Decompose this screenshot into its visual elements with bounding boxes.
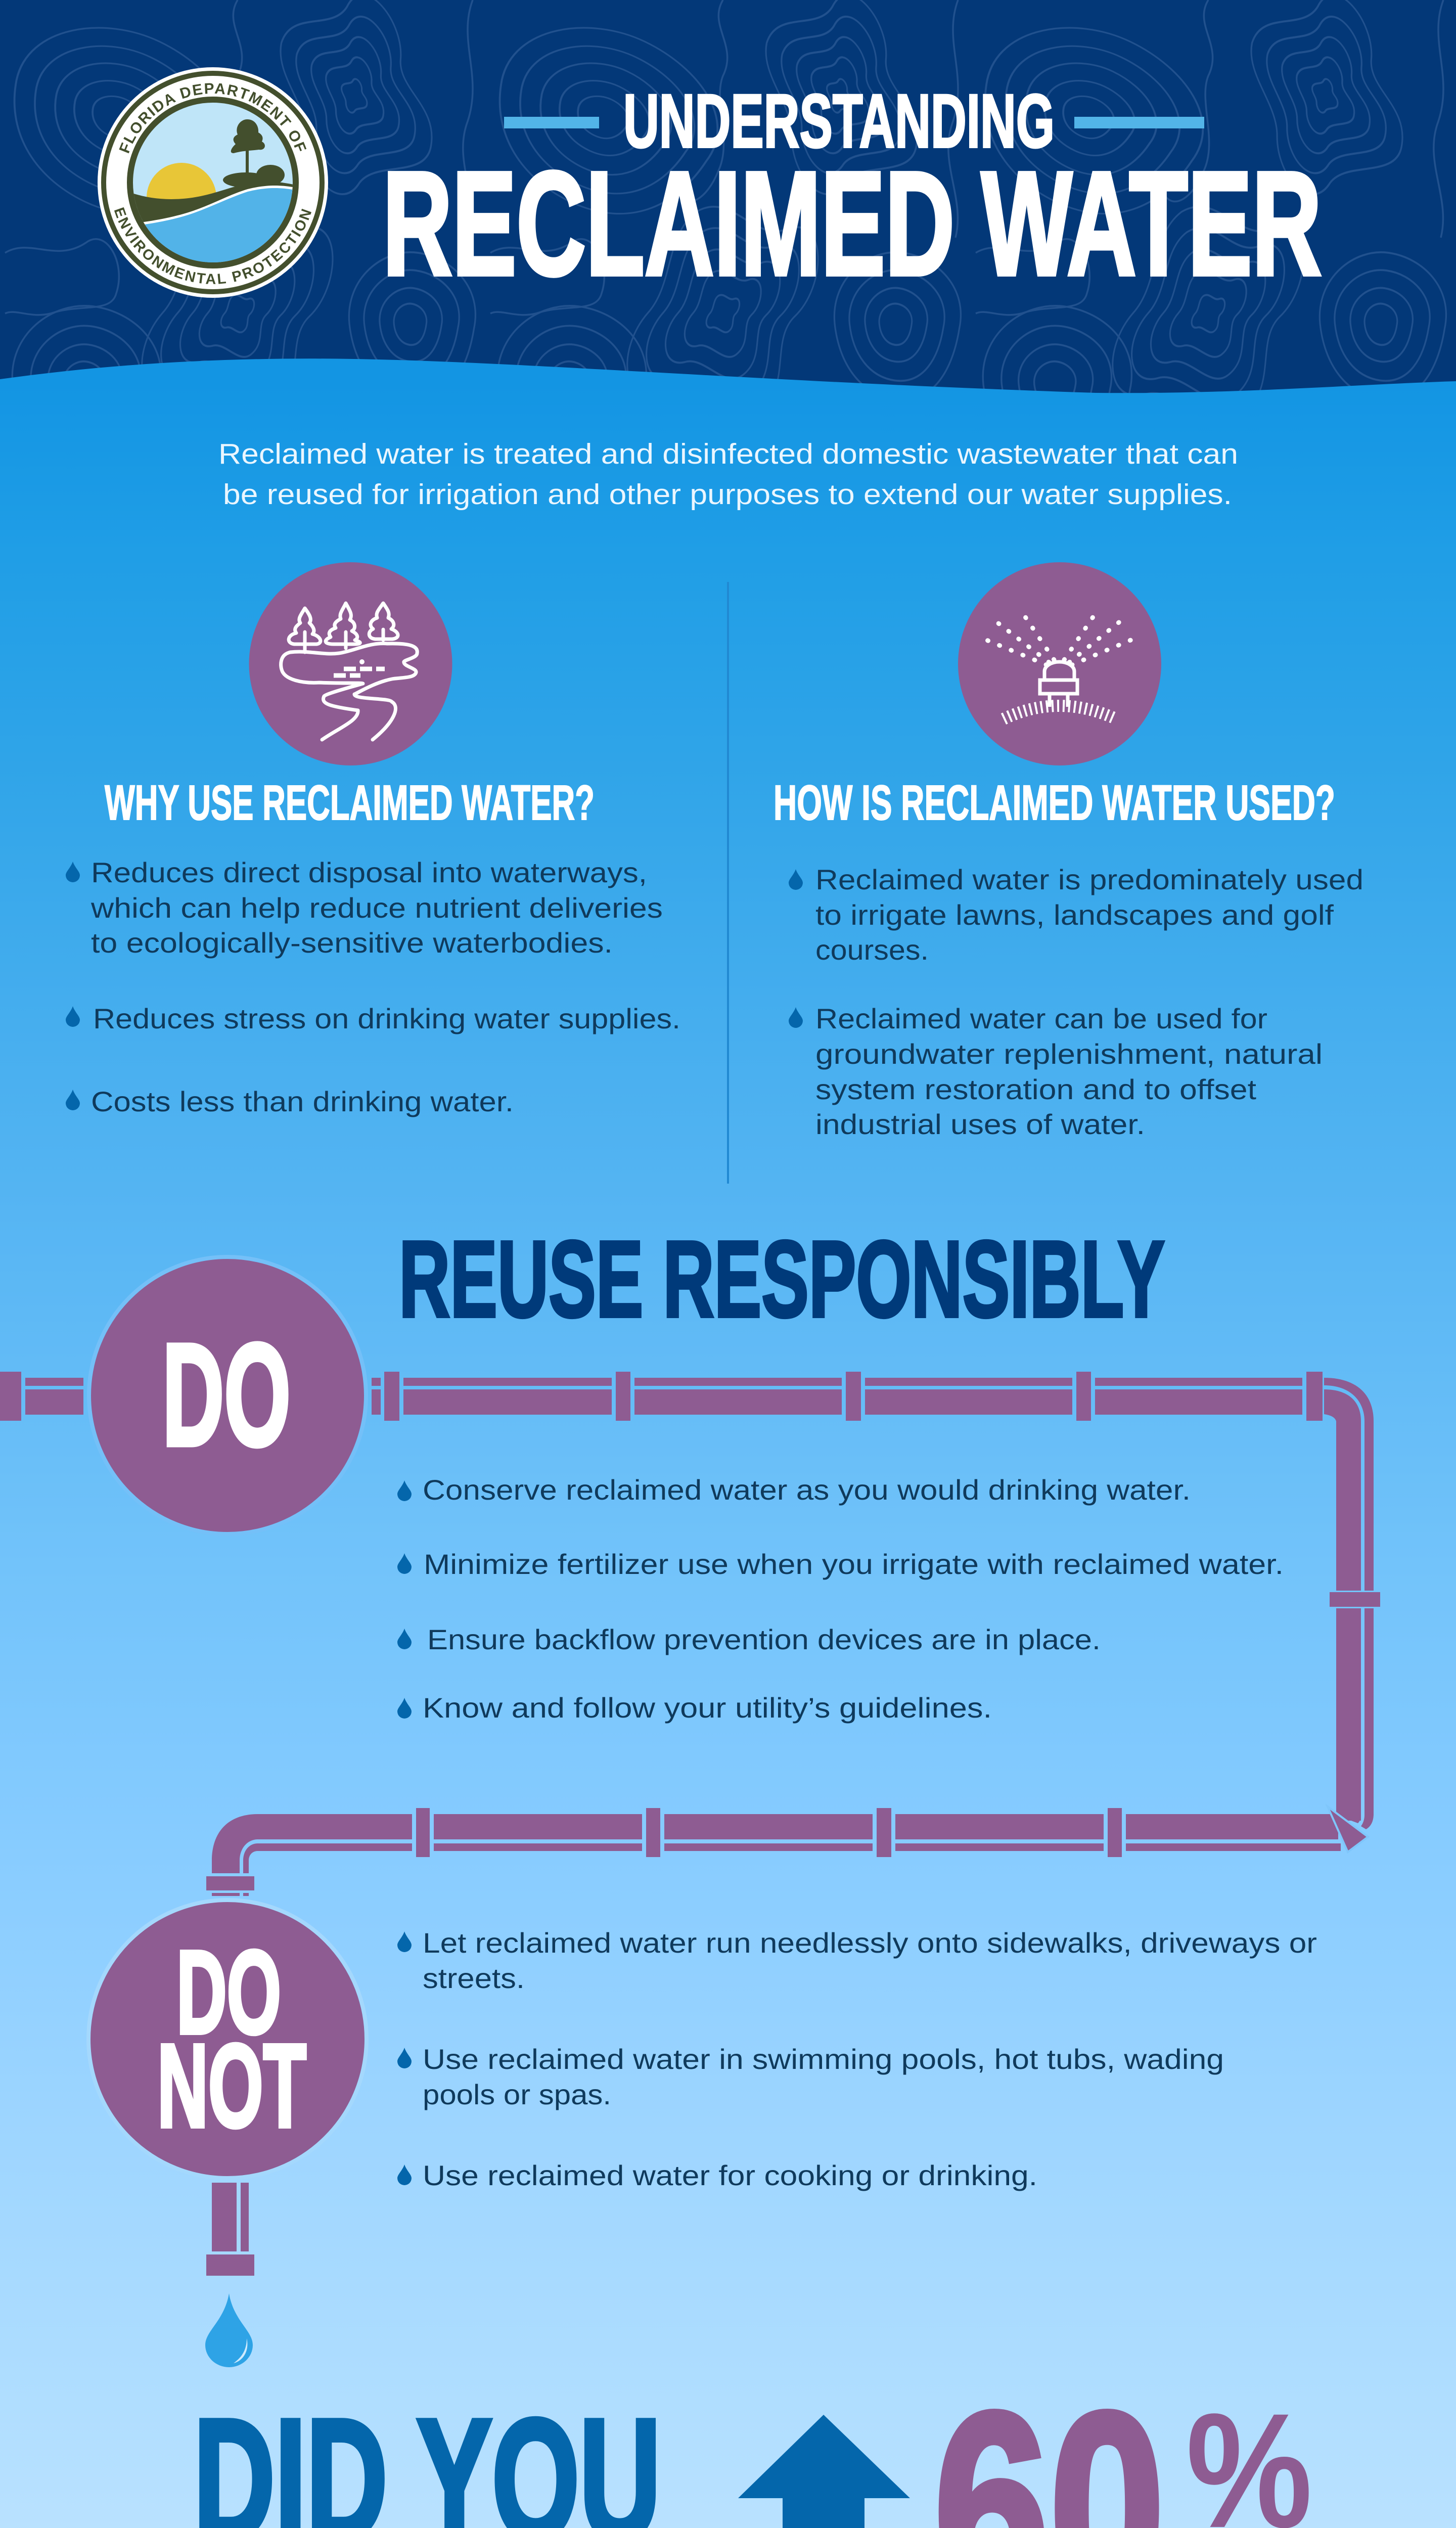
panel: why use reclaimed water: [66, 562, 680, 1117]
panel: how is reclaimed water used: [774, 562, 1363, 1140]
bullet: irrigate lawns: courses.: [815, 934, 929, 966]
pipe: right corner and vertical run: [1324, 1378, 1380, 1829]
icon: sprinkler: [958, 562, 1161, 765]
pipe: top run: [0, 1372, 1323, 1421]
bullet: groundwater replenishment: Reclaimed water can be used for: [815, 1003, 1267, 1034]
purple pipe system: [0, 1372, 1380, 2276]
pipe: arrow joint: [1328, 1807, 1368, 1852]
bullet: groundwater replenishment: industrial uses of water.: [815, 1108, 1145, 1140]
list: do bullets: Minimize fertilizer use when you irrigate with reclaimed water.: [424, 1548, 1284, 1580]
heading: why use reclaimed water: WHY USE RECLAIMED WATER?: [105, 775, 595, 830]
badge: do: [89, 1257, 366, 1534]
bullet: irrigate lawns: to irrigate lawns, landscapes and golf: [815, 899, 1334, 931]
list: do not bullets: Use reclaimed water for cooking or drinking.: [423, 2159, 1037, 2191]
bullet: reduces direct disposal: [66, 856, 663, 959]
list: do bullets: Ensure backflow prevention devices are in place.: [427, 1623, 1101, 1655]
title accent dash right: [1074, 117, 1204, 128]
list: do not bullets: [397, 1927, 1317, 2191]
bullet: reduces direct disposal: to ecologically-sensitive waterbodies.: [91, 927, 613, 959]
bullet: costs less: Costs less than drinking water.: [91, 1086, 514, 1117]
intro text: Reclaimed water is treated and disinfected domestic wastewater that can: [218, 438, 1238, 470]
intro text: be reused for irrigation and other purposes to extend our water supplies.: [223, 478, 1232, 511]
logo: Florida DEP seal: FLORIDA DEPARTMENT OF: [119, 83, 306, 154]
title line: Understanding: UNDERSTANDING: [623, 78, 1055, 163]
list: do bullets: Conserve reclaimed water as you would drinking water.: [423, 1474, 1191, 1506]
list: do not bullets: streets.: [423, 1962, 525, 1994]
bullet: reduces direct disposal: which can help reduce nutrient deliveries: [90, 892, 663, 924]
logo: Florida DEP seal: ENVIRONMENTAL PROTECTION: [114, 207, 311, 284]
title accent dash left: [504, 117, 599, 128]
header: [98, 67, 1322, 306]
list: do bullets: [397, 1474, 1284, 1724]
logo: Florida DEP seal: [98, 67, 328, 298]
list: do not bullets: Use reclaimed water in swimming pools, hot tubs, wading: [423, 2043, 1224, 2075]
pipe: left corner: [206, 1814, 412, 1896]
badge: do not: DO: [176, 1926, 281, 2058]
bullet: reduces stress: Reduces stress on drinking water supplies.: [93, 1003, 680, 1034]
bullet: reduces direct disposal: Reduces direct disposal into waterways,: [91, 856, 647, 888]
icon: falling water drop: [205, 2293, 253, 2367]
bullet: groundwater replenishment: [789, 1003, 1323, 1140]
pipe: lower spout: [206, 2183, 254, 2276]
list: do not bullets: pools or spas.: [423, 2079, 611, 2110]
bullet: irrigate lawns: Reclaimed water is predominately used: [815, 864, 1363, 895]
pipe: bottom run: [416, 1808, 1341, 1857]
icon: up arrow: [738, 2415, 910, 2528]
header topographic pattern: [0, 0, 1456, 404]
intro text: [218, 438, 1238, 511]
bullet: groundwater replenishment: system restoration and to offset: [815, 1073, 1256, 1105]
list: do not bullets: Let reclaimed water run needlessly onto sidewalks, driveways or: [423, 1927, 1317, 1959]
divider: [727, 582, 729, 1184]
bullet: irrigate lawns: [789, 864, 1363, 966]
bullet: groundwater replenishment: groundwater replenishment, natural: [815, 1038, 1323, 1070]
badge: do not: NOT: [157, 2019, 306, 2152]
badge: do not: [88, 1900, 367, 2178]
badge: do: DO: [162, 1314, 291, 1476]
icon: trees, lake and river: [249, 562, 452, 765]
list: do bullets: Know and follow your utility’s guidelines.: [423, 1692, 992, 1724]
heading: did you know: [194, 2383, 666, 2528]
